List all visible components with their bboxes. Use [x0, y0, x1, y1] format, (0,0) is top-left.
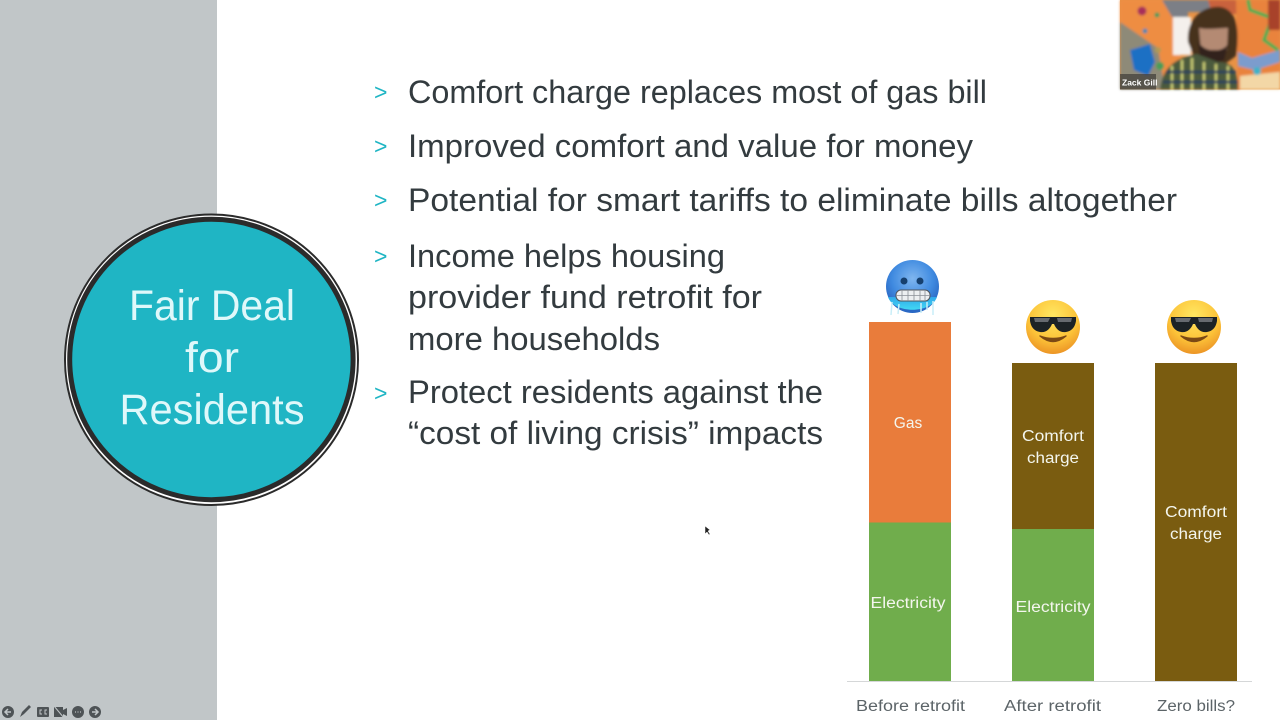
bullet: income: provider fund retrofit for: [408, 279, 762, 315]
bar: before retrofit: Gas: [894, 415, 922, 432]
bullet: income: more households: [408, 321, 660, 357]
badge title: for: [185, 334, 239, 382]
control: captions: [37, 707, 49, 717]
axis labels: Zero bills?: [1157, 698, 1235, 715]
bar: before retrofit: [869, 322, 951, 681]
bullet: income: >: [374, 243, 387, 269]
badge title: Residents: [120, 386, 304, 434]
bar: after retrofit: Comfort: [1022, 428, 1085, 445]
webcam name tag: Zack Gill: [1122, 78, 1157, 88]
axis labels: Before retrofit: [856, 698, 966, 715]
badge title: Fair Deal: [129, 282, 295, 330]
bar: before retrofit: Electricity: [870, 595, 946, 612]
bullet: income: Income helps housing: [408, 238, 725, 274]
icon: sunglasses face emoji, after retrofit: [1026, 300, 1080, 354]
badge title: [120, 282, 304, 434]
control: more: [72, 706, 84, 718]
axis labels: [856, 698, 1235, 715]
slide controls toolbar: [2, 705, 101, 718]
bullet: cost of living: >: [374, 380, 387, 406]
badge: Fair Deal for Residents: [65, 214, 358, 505]
bar: zero bills: [1155, 363, 1237, 681]
bar: zero bills: charge: [1170, 526, 1222, 543]
icon: freezing face emoji: [886, 260, 939, 315]
axis labels: After retrofit: [1004, 698, 1102, 715]
bullet: smart tariffs: Potential for smart tariffs to eliminate bills altogether: [408, 182, 1177, 218]
stacked bar chart: [847, 322, 1252, 715]
bullet: cost of living: [374, 374, 823, 451]
bar: after retrofit: [1012, 363, 1094, 681]
bullet: improved comfort: Improved comfort and value for money: [408, 128, 973, 164]
bullet: comfort charge: Comfort charge replaces most of gas bill: [408, 74, 987, 110]
control: camera off: [54, 706, 67, 718]
bullet: comfort charge: >: [374, 79, 387, 105]
webcam thumbnail: [1120, 0, 1280, 90]
presenter: [1188, 7, 1238, 66]
icon: sunglasses face emoji, zero bills: [1167, 300, 1221, 354]
bullet: smart tariffs: >: [374, 187, 387, 213]
bullet: cost of living: “cost of living crisis” impacts: [408, 415, 823, 451]
control: next: [89, 706, 101, 718]
bar: after retrofit: Electricity: [1016, 599, 1091, 616]
control: previous: [2, 706, 14, 718]
bullet list: [374, 74, 1177, 451]
webcam name tag: [1120, 74, 1157, 90]
bar: after retrofit: charge: [1027, 450, 1079, 467]
left grey side panel: [0, 0, 217, 720]
control: pen: [20, 705, 31, 717]
bullet: income: [374, 238, 762, 357]
bullet: improved comfort: >: [374, 133, 387, 159]
bullet: cost of living: Protect residents against the: [408, 374, 823, 410]
bar: zero bills: Comfort: [1165, 504, 1228, 521]
mouse cursor: [705, 526, 710, 535]
